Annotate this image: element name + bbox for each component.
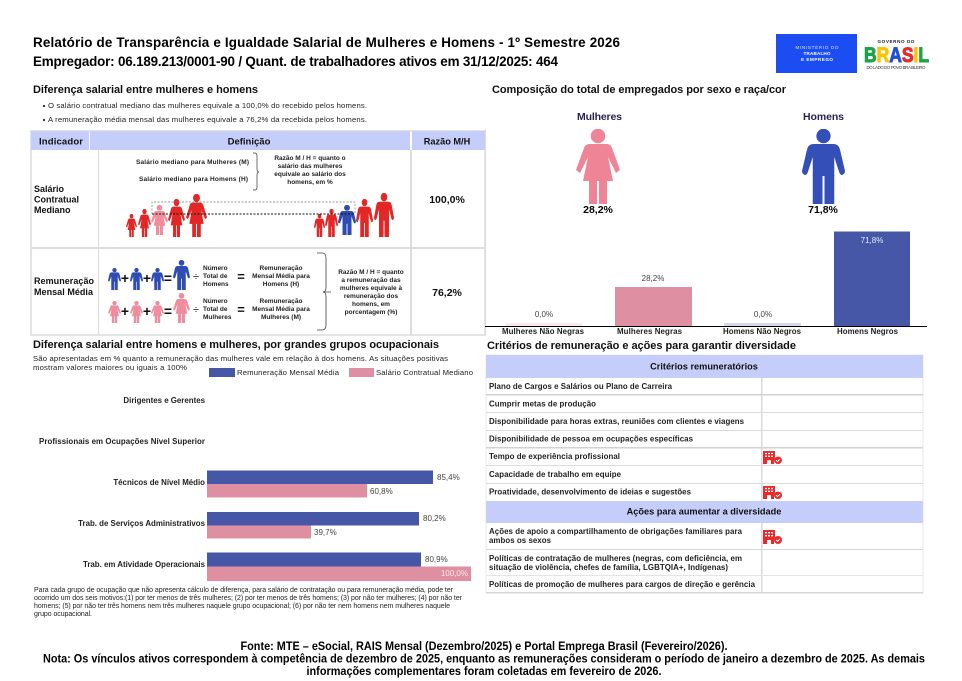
panel: mulheres: 28,2% — [583, 204, 614, 216]
footer — [43, 641, 925, 678]
icon: empresa com check — [763, 486, 782, 499]
formula: mulheres: ÷ — [193, 304, 199, 316]
horizontal bar chart: Dirigentes e Gerentes — [123, 396, 206, 405]
table header: Indicador — [39, 136, 83, 148]
definition: razão remuneração: Razão M / H = quanto — [338, 269, 404, 276]
definition: salário mediano: salário das mulheres — [278, 163, 343, 170]
formula: mulheres: = — [164, 303, 172, 319]
actions list: Políticas de contratação de mulheres (negras, com deficiência, em — [489, 554, 742, 563]
group: técnicos: 60,8% — [370, 487, 393, 496]
logo: Ministério do Trabalho e Emprego: MINISTÉRIO DO — [796, 44, 839, 50]
row label: salário contratual mediano: Salário — [34, 184, 65, 194]
definition: salário mediano: homens, em % — [287, 179, 333, 186]
icon group: mulheres em fila — [126, 194, 207, 237]
heading: composição: Composição do total de empregados por sexo e raça/cor — [492, 84, 787, 96]
group: atividade operacionais — [83, 552, 471, 581]
criteria list: Disponibilidade para horas extras, reuniões com clientes e viagens — [489, 417, 745, 426]
column chart: Homens Não Negros — [723, 327, 802, 336]
criteria list: Capacidade de trabalho em equipe — [489, 470, 622, 479]
definition: razão remuneração: a remuneração das — [341, 277, 401, 284]
formula: homens: Total de — [203, 273, 228, 280]
table header — [31, 131, 485, 150]
footer: Nota: Os vínculos ativos correspondem à competência de dezembro de 2025, enquanto as remunerações consideram o período de janeiro a dezembro de 2025. As demais — [43, 654, 925, 666]
definition: salário mediano — [136, 153, 346, 190]
criteria list: Disponibilidade de pessoa em ocupações específicas — [489, 434, 694, 444]
criteria list — [489, 382, 745, 496]
formula: homens: Número — [203, 265, 228, 272]
value: 76,2%: 76,2% — [432, 287, 463, 299]
footnote: Para cada grupo de ocupação que não apresenta cálculo de diferença, para salário de contratação ou para remuneração média, pode ter — [34, 587, 454, 594]
criteria list: Tempo de experiência profissional — [489, 452, 620, 461]
horizontal bar chart: Profissionais em Ocupações Nível Superior — [39, 437, 205, 446]
group: técnicos: Técnicos de Nível Médio — [113, 478, 205, 487]
panel: homens: 71,8% — [808, 204, 839, 216]
actions list: ambos os sexos — [489, 536, 552, 545]
formula: mulheres: Mensal Média para — [252, 306, 310, 313]
group: serviços administrativos — [78, 512, 446, 538]
formula: homens: Remuneração — [260, 265, 303, 272]
criteria list: Cumprir metas de produção — [489, 400, 596, 408]
logo: Governo do Brasil: GOVERNO DO — [878, 39, 915, 44]
definition: salário mediano: Salário mediano para Mulheres (M) — [136, 159, 249, 166]
row label: remuneração mensal média — [34, 276, 94, 297]
formula: mulheres: Mulheres (M) — [261, 314, 301, 321]
group: serviços administrativos: Trab. de Serviços Administrativos — [78, 519, 206, 528]
definition: razão remuneração: homens, em — [352, 301, 390, 308]
panel: mulheres — [576, 111, 622, 216]
header: ações diversidade — [486, 501, 923, 523]
panel: critérios remuneratórios — [486, 355, 923, 594]
icon: empresa com check — [763, 451, 782, 464]
formula: homens: ÷ — [193, 271, 199, 283]
row label: salário contratual mediano — [34, 184, 79, 215]
group: técnicos — [113, 470, 460, 498]
heading: diferença salarial: Diferença salarial entre mulheres e homens — [33, 84, 258, 96]
bullet list: A remuneração média mensal das mulheres equivale a 76,2% da recebida pelos homens. — [48, 115, 367, 124]
formula: mulheres: Mulheres — [203, 314, 232, 321]
criteria list: Plano de Cargos e Salários ou Plano de Carreira — [489, 382, 673, 391]
column chart: 71,8% — [861, 236, 883, 245]
actions list: Políticas de promoção de mulheres para cargos de direção e gerência — [489, 580, 756, 589]
formula: mulheres — [108, 293, 310, 323]
column chart: Mulheres Não Negras — [502, 327, 585, 336]
footnote: ocorrido um dos seis motivos:(1) por ter menos de três mulheres; (2) por ter menos de três homens; (3) por não ter mulheres; (4) por não ter — [34, 595, 463, 602]
column chart: 28,2% — [642, 274, 664, 283]
column chart: Mulheres Negras — [617, 327, 683, 336]
row label: salário contratual mediano: Contratual — [34, 194, 79, 204]
legend — [209, 368, 473, 377]
actions list: Ações de apoio a compartilhamento de obrigações familiares para — [489, 527, 743, 536]
formula: homens: = — [237, 269, 245, 284]
formula: homens: Homens — [203, 281, 229, 288]
table header: Definição — [228, 136, 271, 148]
panel: homens: Homens — [803, 111, 844, 123]
formula: homens: = — [164, 270, 172, 286]
definition: salário mediano: Salário mediano para Homens (H) — [139, 176, 248, 183]
chart description: São apresentadas em % quanto a remuneração das mulheres vale em relação à dos homens. As situações positivas — [33, 354, 448, 363]
definition: salário mediano: equivale ao salário dos — [274, 171, 346, 178]
group: atividade operacionais: 80,9% — [425, 555, 448, 564]
horizontal bar chart — [39, 396, 471, 581]
logo: Governo do Brasil: BRASIL — [864, 44, 929, 67]
heading: grupos ocupacionais: Diferença salarial entre homens e mulheres, por grandes grupos ocupacionais — [33, 339, 439, 351]
logo: Governo do Brasil: DO LADO DO POVO BRASILEIRO — [866, 65, 926, 70]
title: Relatório de Transparência e Igualdade Salarial de Mulheres e Homens - 1º Semestre 2026 — [33, 35, 620, 50]
formula: homens: + — [143, 270, 151, 286]
group: atividade operacionais: Trab. em Atividade Operacionais — [83, 560, 206, 569]
logo: Ministério do Trabalho e Emprego — [776, 34, 857, 73]
legend: Remuneração Mensal Média — [237, 368, 340, 377]
formula: homens: + — [121, 270, 129, 286]
table header: Razão M/H — [424, 136, 471, 146]
title — [33, 35, 620, 69]
criteria list: Proatividade, desenvolvimento de ideias e sugestões — [489, 488, 692, 496]
bullet list — [43, 101, 367, 124]
footnote: grupo ocupacional. — [34, 611, 92, 618]
formula: mulheres: Número — [203, 298, 228, 305]
value: 100,0%: 100,0% — [429, 194, 465, 206]
column chart: 0,0% — [535, 310, 553, 319]
row label: remuneração mensal média: Mensal Média — [34, 287, 94, 297]
panel: homens — [802, 111, 845, 216]
header: ações diversidade: Ações para aumentar a diversidade — [627, 506, 781, 516]
panel: mulheres: Mulheres — [577, 111, 622, 123]
chart description: mostram valores maiores ou iguais a 100% — [33, 363, 187, 372]
footnote — [34, 587, 463, 618]
group: serviços administrativos: 80,2% — [423, 514, 446, 523]
header: critérios remuneratórios: Critérios remuneratórios — [650, 362, 758, 372]
chart description — [33, 354, 448, 372]
footer: Fonte: MTE – eSocial, RAIS Mensal (Dezembro/2025) e Portal Emprega Brasil (Fevereiro/2026). — [240, 641, 728, 653]
icon group: homens em fila — [314, 193, 394, 237]
definition: razão remuneração: porcentagem (%) — [345, 309, 397, 316]
logo: Ministério do Trabalho e Emprego: E EMPREGO — [801, 57, 833, 62]
header: critérios remuneratórios — [486, 355, 923, 378]
actions list: situação de violência, chefes de família, LGBTQIA+, Indígenas) — [489, 563, 728, 572]
column chart: Homens Negros — [837, 327, 899, 336]
icon: empresa com check — [763, 530, 782, 544]
bullet list: O salário contratual mediano das mulheres equivale a 100,0% do recebido pelos homens. — [48, 101, 367, 110]
formula: mulheres: + — [121, 303, 129, 319]
formula: mulheres: Remuneração — [260, 298, 303, 305]
panel: tabela de indicadores — [31, 131, 485, 335]
actions list — [489, 527, 756, 589]
column chart: 0,0% — [754, 310, 772, 319]
group: serviços administrativos: 39,7% — [314, 528, 337, 537]
row label: salário contratual mediano: Mediano — [34, 205, 71, 215]
legend: Salário Contratual Mediano — [376, 368, 473, 377]
formula: mulheres: Total de — [203, 306, 228, 313]
group: atividade operacionais: 100,0% — [441, 569, 468, 578]
title: Empregador: 06.189.213/0001-90 / Quant. de trabalhadores ativos em 31/12/2025: 464 — [33, 54, 559, 69]
footnote: homens; (5) por não ter três homens nem três mulheres naquele grupo ocupacional; (6) por não ter nem homens nem mulheres naquele — [34, 603, 450, 610]
footer: informações complementares foram coletadas em fevereiro de 2026. — [306, 666, 662, 678]
brace — [317, 253, 331, 330]
group: técnicos: 85,4% — [437, 473, 460, 482]
definition: razão remuneração: mulheres equivale à — [340, 285, 402, 292]
formula: mulheres: + — [143, 303, 151, 319]
logo: Governo do Brasil — [857, 34, 935, 73]
formula: homens: Homens (H) — [263, 281, 299, 288]
formula: homens: Mensal Média para — [252, 273, 310, 280]
column chart — [485, 232, 927, 336]
row label: remuneração mensal média: Remuneração — [34, 276, 94, 286]
formula: mulheres: = — [237, 302, 245, 317]
formula: homens — [108, 260, 310, 290]
definition: razão remuneração — [338, 269, 404, 316]
heading: critérios: Critérios de remuneração e ações para garantir diversidade — [487, 340, 796, 352]
logo: Ministério do Trabalho e Emprego: TRABALHO — [804, 51, 831, 56]
definition: salário mediano: Razão M / H = quanto o — [274, 155, 346, 162]
definition: razão remuneração: remuneração dos — [344, 293, 398, 300]
